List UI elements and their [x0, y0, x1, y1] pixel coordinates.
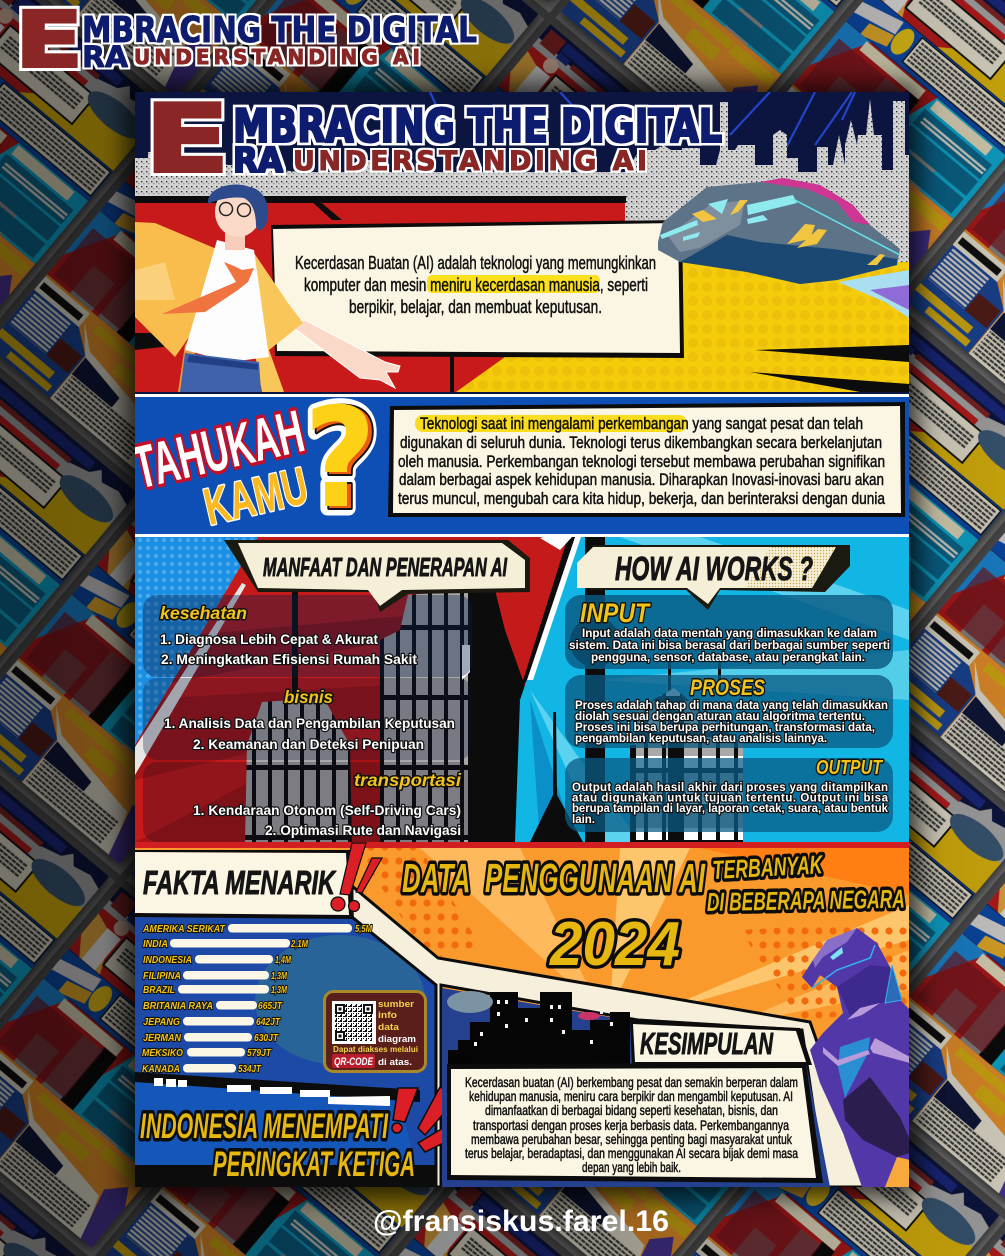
- QR code card: info: [378, 1010, 397, 1021]
- red comic panel: [135, 196, 626, 392]
- chart background: [135, 915, 440, 1187]
- heading: Tahukah Kamu: [135, 406, 308, 526]
- icon: exclamation marks: [331, 843, 382, 912]
- panel: data 2024: [135, 842, 910, 1187]
- title: RA: [233, 141, 283, 181]
- proses: diolah sesuai dengan aturan atau algoritma tertentu.: [575, 711, 865, 723]
- QR code card: diagram: [378, 1034, 416, 1045]
- bar: Indonesia: 1,4M: [275, 954, 291, 966]
- text panel: conclusion: kehidupan manusia, meniru cara berpikir dan mengambil keputusan. AI: [469, 1088, 793, 1104]
- output: atau digunakan untuk tujuan tertentu. Output ini bisa: [572, 792, 889, 804]
- panel: how AI works: [515, 537, 909, 842]
- bar: Jerman: JERMAN: [143, 1032, 181, 1044]
- input: Input adalah data mentah yang dimasukkan ke dalam: [582, 628, 877, 640]
- heading: data penggunaan AI: DATA PENGGUNAAN AI: [402, 855, 706, 901]
- character: student: [135, 184, 400, 392]
- input: pengguna, sensor, database, atau perangkat lain.: [591, 652, 865, 664]
- bar: Jepang: JEPANG: [143, 1016, 180, 1028]
- title: [150, 98, 724, 176]
- proses: Proses ini bisa berupa perhitungan, transformasi data,: [575, 722, 875, 734]
- bar: Jerman: [143, 1032, 279, 1044]
- heading: Tahukah Kamu: TAHUKAH: [127, 397, 310, 501]
- bar: Brazil: BRAZIL: [143, 984, 175, 996]
- bar: Jepang: [142, 1016, 282, 1026]
- text panel: conclusion: membawa perubahan besar, sehingga penting bagi masyarakat untuk: [471, 1131, 793, 1147]
- character: robot bird: [802, 928, 910, 1187]
- heading: data penggunaan AI: DI BEBERAPA NEGARA: [707, 884, 905, 917]
- bar: Jerman: 630JT: [254, 1032, 279, 1044]
- bar: India: 2,1M: [290, 938, 308, 950]
- bar: Kanada: KANADA: [142, 1063, 180, 1075]
- bisnis: bisnis: [284, 687, 333, 707]
- text panel: conclusion: terus belajar, beradaptasi, dan menggunakan AI secara bijak demi masa: [465, 1145, 798, 1161]
- kesehatan: kesehatan: [160, 603, 247, 623]
- bar: India: INDIA: [143, 938, 168, 950]
- kesehatan: 2. Meningkatkan Efisiensi Rumah Sakit: [161, 652, 418, 667]
- kesehatan: 1. Diagnosa Lebih Cepat & Akurat: [160, 632, 379, 647]
- banner: benefits heading: [224, 540, 530, 612]
- banner: how AI works heading: [577, 545, 850, 610]
- top-left header logo: MBRACING THE DIGITAL: [82, 10, 477, 51]
- city night scene: [442, 988, 830, 1187]
- bar chart: [142, 923, 372, 1075]
- icon: red exclamation burst: [392, 1087, 460, 1152]
- bar: Amerika Serikat: [142, 923, 372, 935]
- panel overlays: [565, 595, 893, 832]
- white diagonal band: [352, 886, 868, 1187]
- speech box: Kecerdasan Buatan (AI) adalah teknologi yang memungkinkan: [295, 253, 656, 273]
- bar: Kanada: [142, 1063, 262, 1075]
- bisnis: 2. Keamanan dan Deteksi Penipuan: [193, 737, 424, 752]
- speech box: [271, 220, 684, 358]
- yellow halftone panel: [456, 262, 909, 392]
- input: INPUT: [580, 598, 651, 628]
- text panel: terus muncul, mengubah cara kita hidup, bekerja, dan berinteraksi dengan dunia: [398, 490, 886, 508]
- callout: Indonesia peringkat ketiga: PERINGKAT KETIGA: [213, 1145, 415, 1184]
- callout: Indonesia peringkat ketiga: INDONESIA MENEMPATI: [140, 1107, 389, 1146]
- QR code card: data: [378, 1022, 400, 1033]
- proses: PROSES: [690, 675, 765, 700]
- text panel: oleh manusia. Perkembangan teknologi tersebut membawa perubahan signifikan: [398, 453, 885, 471]
- title: E: [144, 85, 230, 193]
- QR code card: di atas.: [378, 1057, 412, 1068]
- heading: data penggunaan AI: TERBANYAK: [712, 849, 825, 885]
- buildings: [245, 590, 530, 842]
- bar: Jepang: 642JT: [256, 1016, 281, 1028]
- heading: data penggunaan AI: 2024: [549, 910, 680, 979]
- bar: Filipina: FILIPINA: [143, 970, 181, 982]
- output: [572, 757, 889, 826]
- icon: QR code: [332, 1001, 376, 1044]
- city skyline: [135, 99, 909, 262]
- text panel: dalam berbagai aspek kehidupan manusia. Diharapkan Inovasi-inovasi baru akan: [399, 471, 884, 489]
- transportasi: transportasi: [354, 770, 462, 790]
- poster: [127, 85, 910, 1187]
- bar: Meksiko: [142, 1047, 272, 1059]
- buildings: [530, 537, 743, 842]
- QR code card: [324, 992, 426, 1072]
- output: Output adalah hasil akhir dari proses yang ditampilkan: [572, 782, 888, 794]
- heading: fakta menarik: FAKTA MENARIK: [143, 864, 337, 901]
- speech box: komputer dan mesin meniru kecerdasan manusia, seperti: [304, 275, 648, 295]
- handle credit: @fransiskus.farel.16: [373, 1205, 669, 1238]
- kesehatan: [160, 603, 418, 667]
- icon: question mark: ?: [306, 380, 378, 541]
- top-left header logo: UNDERSTANDING AI: [134, 45, 420, 69]
- banner: how AI works heading: HOW AI WORKS ?: [615, 550, 813, 587]
- proses: [575, 675, 888, 745]
- panel: hero: [135, 85, 909, 397]
- text panel: conclusion: dimanfaatkan di berbagai bidang seperti kesehatan, bisnis, dan: [485, 1102, 778, 1118]
- bar: Britania Raya: [142, 1000, 284, 1010]
- bar: Amerika Serikat: 5,5M: [355, 923, 372, 935]
- speech box: berpikir, belajar, dan membuat keputusan.: [349, 297, 602, 317]
- proses: pengambilan keputusan, atau analisis lainnya.: [575, 733, 827, 745]
- title: UNDERSTANDING AI: [293, 146, 647, 177]
- text panel: conclusion: [447, 1063, 823, 1183]
- QR code card: QR-CODE: [334, 1056, 373, 1068]
- icon: question mark: ?: [308, 380, 380, 541]
- transportasi: 1. Kendaraan Otonom (Self-Driving Cars): [193, 803, 461, 818]
- icon: question mark: [308, 398, 377, 516]
- bar: Meksiko: 579JT: [247, 1047, 272, 1059]
- output: OUTPUT: [816, 757, 883, 779]
- top-left header logo: [15, 0, 477, 84]
- QR code card: Dapat diakses melalui: [333, 1045, 418, 1054]
- transportasi: [193, 770, 462, 838]
- panel overlays: [143, 595, 472, 842]
- bisnis: [164, 687, 455, 752]
- input: sistem. Data ini bisa berasal dari berbagai sumber seperti: [569, 640, 890, 652]
- text panel: [388, 402, 905, 517]
- QR code card: sumber: [378, 999, 414, 1010]
- text panel: conclusion: depan yang lebih baik.: [582, 1159, 681, 1175]
- bar: India: [143, 938, 308, 950]
- bar: Amerika Serikat: AMERIKA SERIKAT: [142, 923, 226, 935]
- bar: Britania Raya: 665JT: [258, 1000, 283, 1012]
- input: [569, 598, 890, 664]
- output: lain.: [572, 814, 595, 826]
- bar: Indonesia: INDONESIA: [143, 954, 192, 966]
- proses: Proses adalah tahap di mana data yang telah dimasukkan: [575, 700, 888, 712]
- bar: Brazil: 1,3M: [271, 984, 287, 996]
- bar: Indonesia: [143, 954, 291, 966]
- bar: Kanada: 534JT: [238, 1063, 262, 1075]
- title: MBRACING THE DIGITAL: [233, 99, 722, 153]
- panel: did you know: [135, 394, 909, 537]
- bar: Meksiko: MEKSIKO: [142, 1047, 183, 1059]
- heading: kesimpulan: [630, 1020, 812, 1065]
- bisnis: 1. Analisis Data dan Pengambilan Keputusan: [164, 716, 455, 731]
- heading: Tahukah Kamu: KAMU: [199, 457, 313, 537]
- text panel: conclusion: transportasi dengan proses kerja berbasis data. Perkembangannya: [473, 1117, 789, 1133]
- callout: Indonesia peringkat ketiga: [140, 1107, 415, 1184]
- icon: question mark: ?: [304, 378, 376, 539]
- bar: Brazil: [143, 984, 287, 996]
- text panel: conclusion: Kecerdasan buatan (AI) berkembang pesat dan semakin berperan dalam: [465, 1074, 798, 1090]
- bar: Filipina: 1,3M: [271, 970, 287, 982]
- bar: Filipina: [143, 970, 287, 982]
- text panel: digunakan di seluruh dunia. Teknologi terus dikembangkan secara berkelanjutan: [400, 434, 882, 452]
- heading: fakta menarik: [135, 850, 354, 919]
- output: berupa tampilan di layar, laporan cetak, suara, atau bentuk: [572, 803, 889, 815]
- heading: data penggunaan AI: [402, 849, 905, 979]
- spaceship: [658, 178, 909, 318]
- bar: Britania Raya: BRITANIA RAYA: [143, 1000, 213, 1012]
- banner: benefits heading: MANFAAT DAN PENERAPAN AI: [263, 552, 507, 582]
- heading: kesimpulan: KESIMPULAN: [640, 1026, 773, 1061]
- panel: benefits of AI: [135, 537, 575, 842]
- transportasi: 2. Optimasi Rute dan Navigasi: [265, 823, 461, 838]
- text panel: Teknologi saat ini mengalami perkembangan yang sangat pesat dan telah: [420, 415, 863, 433]
- top-left header logo: RA: [82, 40, 129, 74]
